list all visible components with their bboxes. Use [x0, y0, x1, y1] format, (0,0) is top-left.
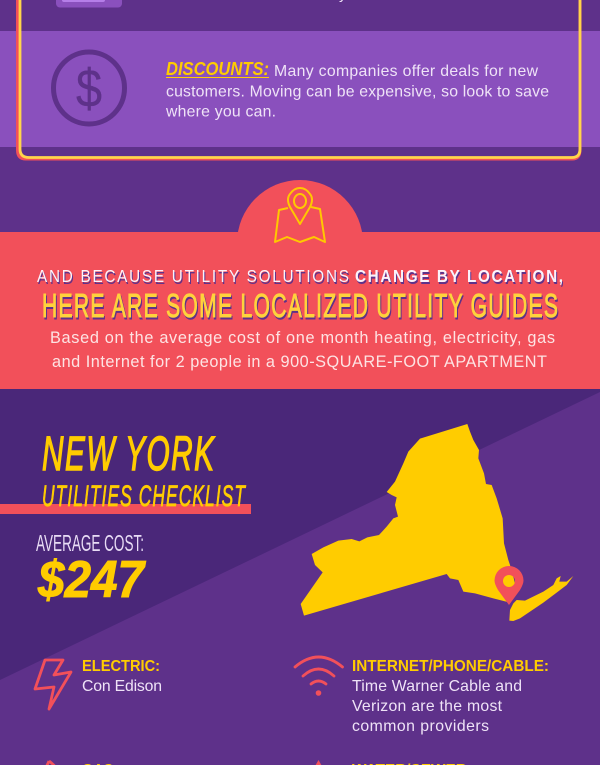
panel: rounded outline frame: [18, 0, 580, 159]
text: electric provider: [82, 658, 162, 695]
text: electric provider: ELECTRIC:: [82, 658, 160, 675]
icon: cropped item at top: [56, 0, 122, 8]
text: average cost label: AVERAGE COST:: [36, 530, 144, 556]
heading: change by location: AND BECAUSE UTILITY SOLUTIONS: [38, 268, 350, 288]
icon: map with pin: [275, 188, 325, 242]
text: discounts tip: where you can.: [165, 104, 276, 120]
heading: change by location: CHANGE BY LOCATION,: [356, 268, 564, 288]
text: banner description: and Internet for 2 people in a 900-SQUARE-FOOT APARTMENT: [52, 353, 547, 371]
heading: New York: NEW YORK: [42, 428, 216, 481]
decorative underline bar: [0, 504, 251, 514]
text: discounts tip: Many companies offer deals for new: [274, 63, 539, 80]
icon: water drop: [310, 760, 327, 765]
heading: localized utility guides: HERE ARE SOME LOCALIZED UTILITY GUIDES: [42, 287, 558, 324]
text: electric provider: Con Edison: [82, 678, 162, 695]
heading: change by location: AND BECAUSE UTILITY SOLUTIONS: [37, 266, 349, 286]
icon: gas flame: [42, 761, 60, 765]
text: internet provider: [352, 658, 549, 735]
text: discounts tip: customers. Moving can be expensive, so look to save: [166, 84, 549, 100]
icon: lightning bolt: [35, 660, 71, 709]
panel: localized guides banner: [0, 180, 600, 389]
text: discounts tip: [165, 59, 549, 120]
icon: dollar coin: $: [76, 59, 102, 119]
icon: location pin: [494, 566, 524, 605]
text: internet provider: INTERNET/PHONE/CABLE:: [352, 658, 549, 675]
heading: change by location: CHANGE BY LOCATION,: [355, 266, 563, 286]
text: internet provider: common providers: [352, 718, 489, 735]
text: internet provider: Verizon are the most: [352, 698, 503, 715]
map: New York state: [301, 424, 573, 621]
text: internet provider: Time Warner Cable and: [352, 678, 522, 695]
text: discounts tip: DISCOUNTS:: [166, 59, 269, 79]
text: banner description: [50, 329, 555, 371]
heading: localized utility guides: HERE ARE SOME LOCALIZED UTILITY GUIDES: [43, 289, 559, 326]
icon: dollar coin: [54, 52, 124, 124]
background: dark diagonal area: [0, 389, 600, 680]
text: banner description: Based on the average cost of one month heating, electricity, gas: [50, 329, 555, 347]
heading: change by location: [37, 266, 564, 288]
icon: wifi: [295, 657, 342, 696]
panel: discounts band: [0, 31, 600, 159]
text: average cost value: $247: [37, 551, 146, 609]
heading: utilities checklist: UTILITIES CHECKLIST: [42, 480, 246, 513]
